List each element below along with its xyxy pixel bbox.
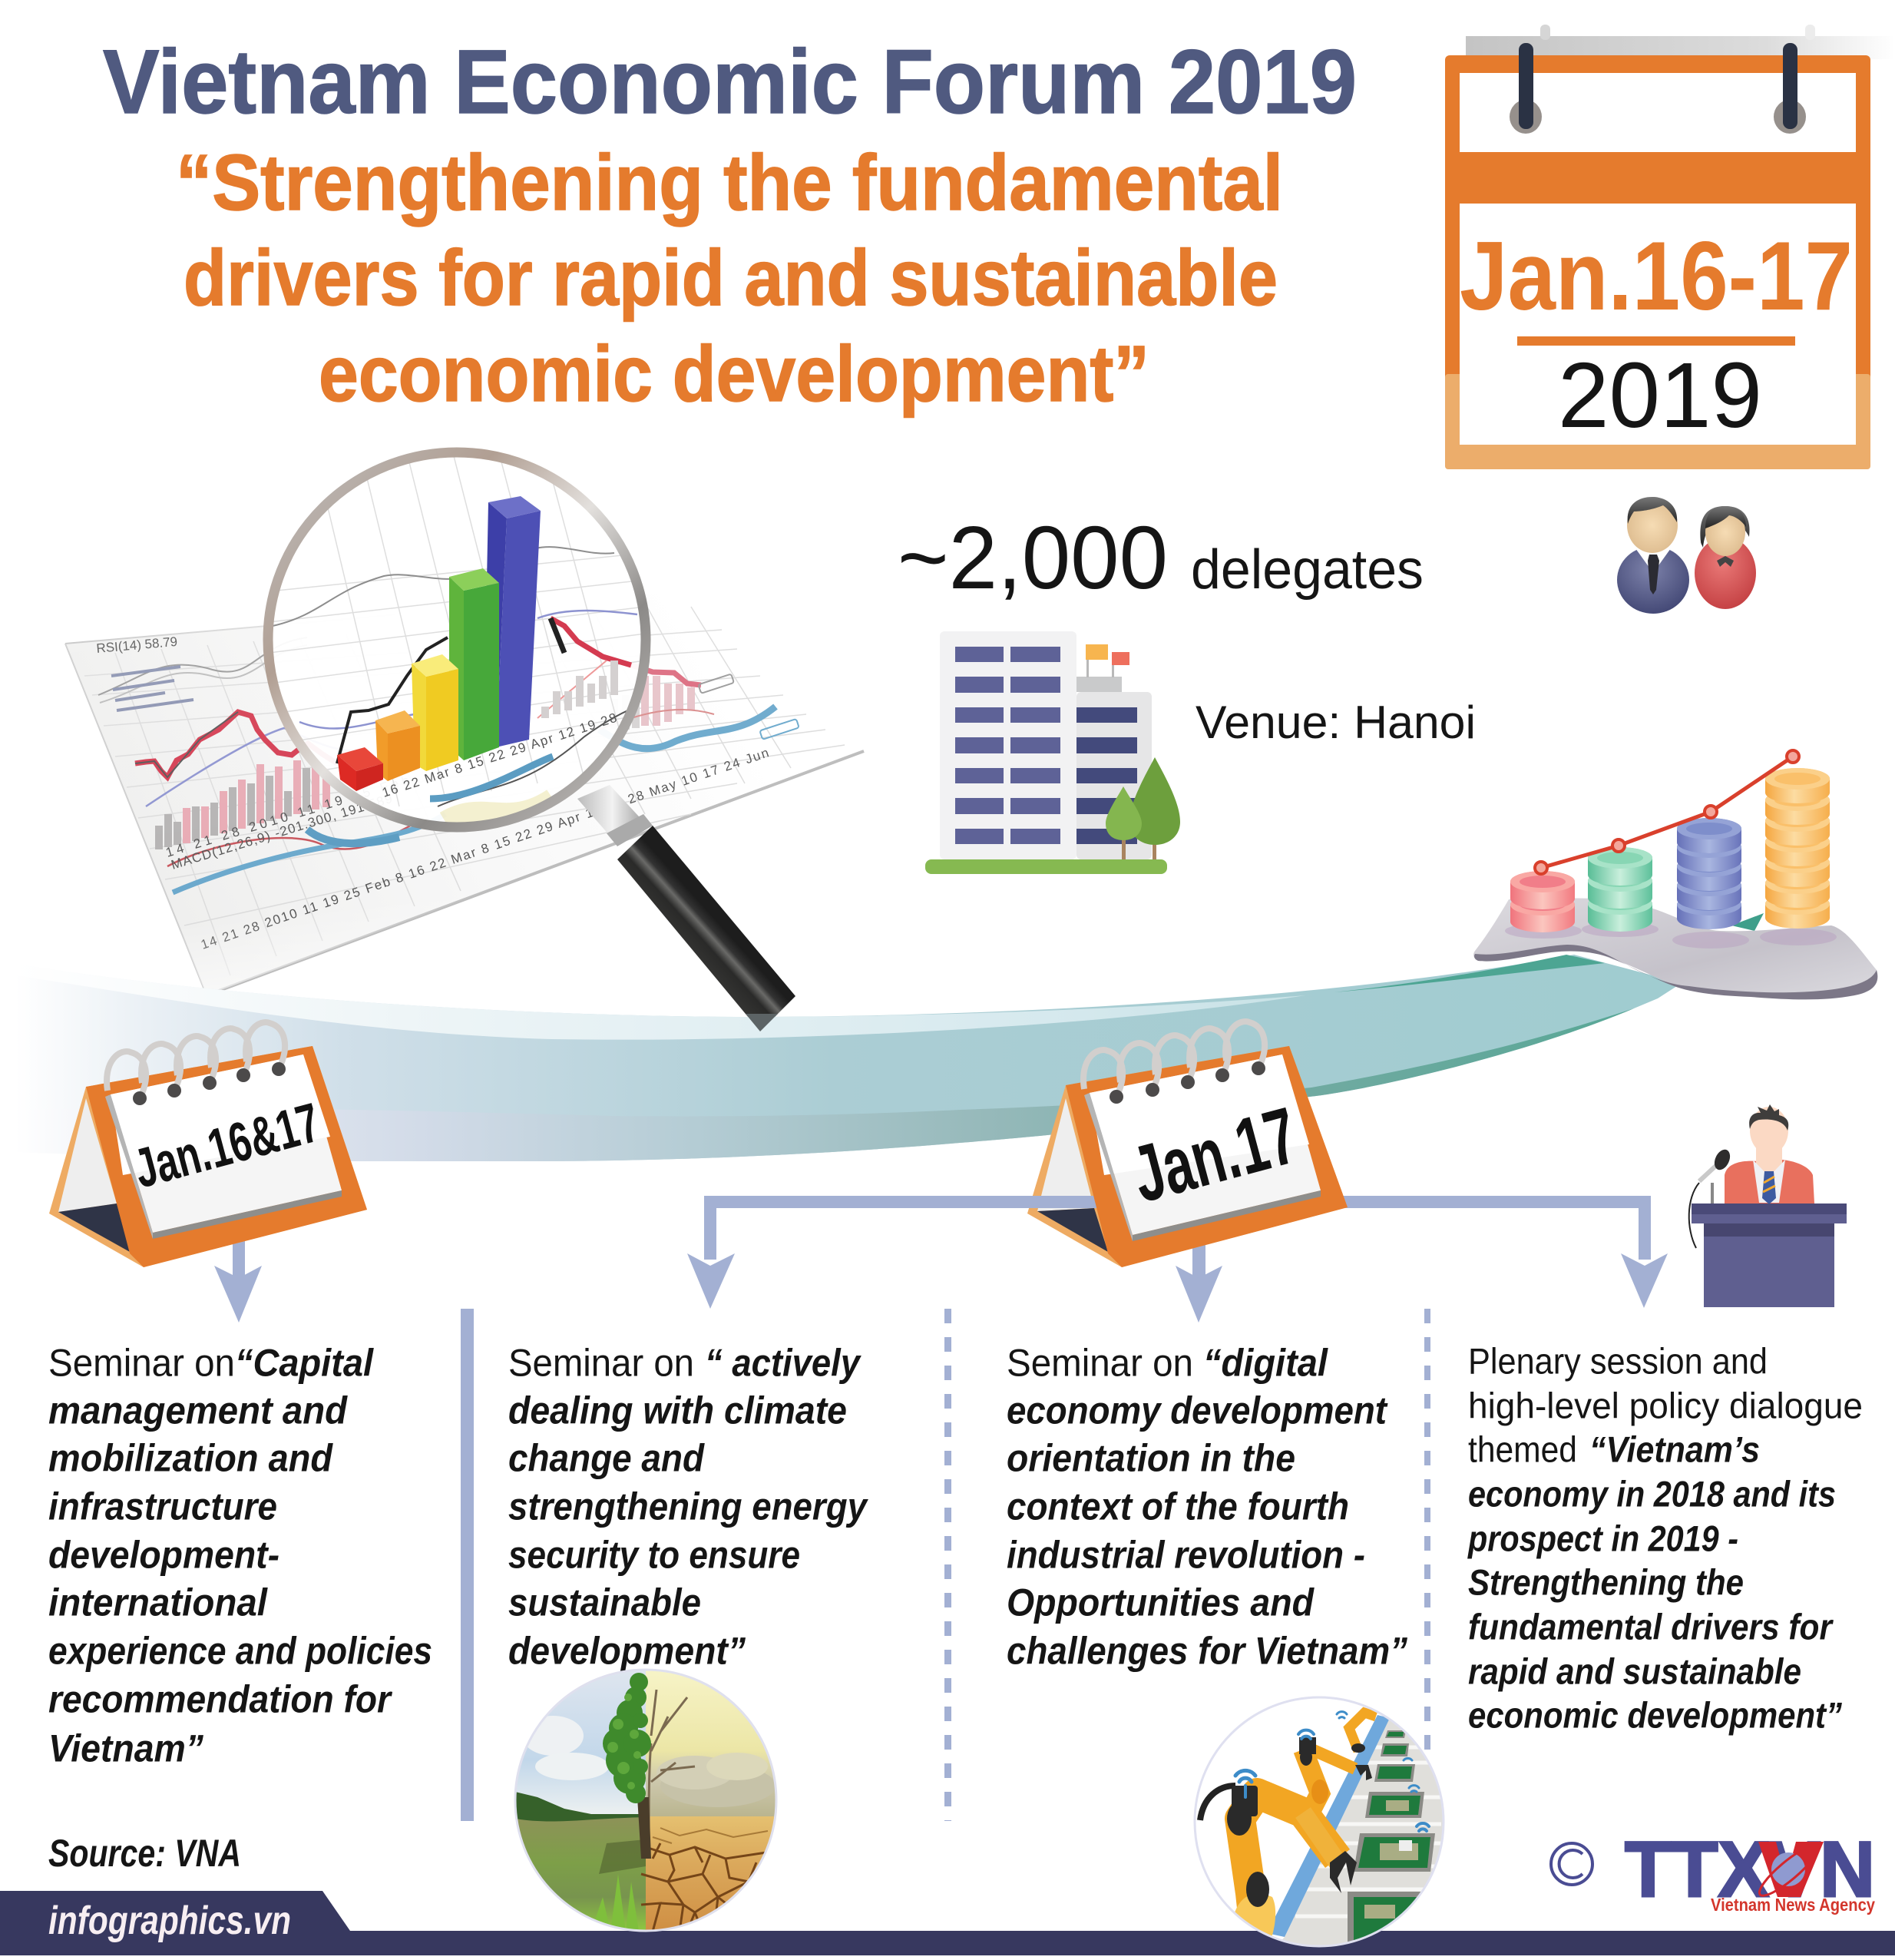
text: seminar 2 bbox=[508, 1341, 868, 1673]
text: seminar 2: strengthening energy bbox=[508, 1485, 868, 1528]
wifi signals bbox=[1235, 1712, 1429, 1831]
text: plenary session: prospect in 2019 - bbox=[1467, 1518, 1738, 1559]
text: seminar 2: Seminar on bbox=[508, 1341, 694, 1384]
text: plenary session: “Vietnam’s bbox=[1589, 1429, 1760, 1470]
image: industrial robots circle bbox=[1195, 1697, 1457, 1951]
robot arm small bbox=[1349, 1713, 1376, 1751]
text: seminar 3: orientation in the bbox=[1007, 1436, 1295, 1479]
platform bbox=[1473, 899, 1877, 998]
footer label: infographics.vn bbox=[48, 1899, 291, 1943]
text: seminar 3: challenges for Vietnam” bbox=[1007, 1630, 1407, 1673]
date label: Jan.16&17 bbox=[127, 1092, 326, 1200]
delegates count: delegates bbox=[1191, 539, 1424, 601]
text: seminar 1: development- bbox=[48, 1533, 279, 1576]
subtitle: drivers for rapid and sustainable bbox=[184, 233, 1278, 322]
lens view bbox=[269, 453, 645, 826]
text: plenary session: rapid and sustainable bbox=[1468, 1651, 1801, 1691]
text: seminar 1: recommendation for bbox=[48, 1677, 392, 1720]
robot arm large bbox=[1200, 1786, 1338, 1951]
text: seminar 2: sustainable bbox=[508, 1581, 701, 1624]
text: seminar 1: management and bbox=[48, 1389, 348, 1432]
chart with magnifying glass bbox=[65, 452, 864, 1031]
robot arm medium bbox=[1307, 1747, 1355, 1769]
text: seminar 2: security to ensure bbox=[508, 1533, 800, 1576]
text: seminar 1: experience and policies bbox=[48, 1630, 432, 1673]
magnifier handle bbox=[577, 785, 795, 1031]
logo: TTXVN: TTXVN bbox=[1625, 1826, 1875, 1913]
calendar: Jan.16-17 2019 bbox=[1445, 25, 1895, 469]
text: seminar 3 bbox=[1007, 1341, 1407, 1673]
subtitle: “Strengthening the fundamental bbox=[176, 138, 1283, 227]
agency name: Vietnam News Agency bbox=[1711, 1895, 1875, 1915]
connector arrows bbox=[214, 1196, 1668, 1323]
chart paper: 14 21 28 2010 11 19 25 Feb 8 16 22 Mar 8 15 22 29 Apr 12 19 28 May 10 17 24 Jun bbox=[199, 745, 771, 952]
pink stack bbox=[1510, 871, 1575, 932]
date label: Jan.17 bbox=[1123, 1091, 1307, 1220]
text: seminar 3: Seminar on bbox=[1007, 1341, 1193, 1384]
text: plenary session: themed bbox=[1468, 1429, 1577, 1470]
source: Source: VNA bbox=[48, 1832, 241, 1875]
icon: delegates bbox=[1617, 497, 1756, 614]
lens ring bbox=[268, 452, 646, 827]
text: seminar 2: change and bbox=[508, 1436, 705, 1479]
blue stack bbox=[1677, 818, 1741, 929]
text: seminar 1: infrastructure bbox=[48, 1485, 277, 1528]
divider: dashed bbox=[1424, 1309, 1430, 1774]
growth line bbox=[1535, 750, 1799, 874]
text: seminar 1: Seminar on bbox=[48, 1341, 235, 1384]
text: seminar 3: “digital bbox=[1203, 1341, 1328, 1384]
text: seminar 1: “Capital bbox=[235, 1341, 374, 1384]
text: plenary session: high-level policy dialogue bbox=[1468, 1386, 1863, 1425]
text: seminar 1: Vietnam” bbox=[48, 1727, 203, 1770]
divider: dashed bbox=[944, 1309, 951, 1821]
text: seminar 2: development” bbox=[508, 1630, 746, 1673]
calendar: Jan.16&17 bbox=[49, 1022, 367, 1267]
3D bars bbox=[337, 496, 541, 791]
title: Vietnam Economic Forum 2019 bbox=[103, 31, 1357, 133]
text: plenary session: economy in 2018 and its bbox=[1468, 1473, 1836, 1515]
icon: building bbox=[925, 631, 1180, 874]
chart paper bbox=[65, 591, 864, 995]
magnifier handle tip over ribbon bbox=[746, 1014, 778, 1031]
text: seminar 3: context of the fourth bbox=[1007, 1485, 1349, 1528]
lens view: 16 22 Mar 8 15 22 29 Apr 12 19 28 bbox=[380, 710, 619, 800]
text: seminar 1: mobilization and bbox=[48, 1436, 333, 1479]
text: seminar 2: dealing with climate bbox=[508, 1389, 847, 1432]
text: plenary session: Plenary session and bbox=[1468, 1341, 1768, 1381]
text: seminar 3: economy development bbox=[1007, 1389, 1388, 1432]
subtitle: economic development” bbox=[319, 329, 1149, 418]
image: climate change circle bbox=[515, 1668, 776, 1932]
delegates count bbox=[898, 508, 1424, 608]
chart paper: MACD(12,26,9) -201.300, 191.589 bbox=[170, 791, 394, 872]
divider: solid bbox=[461, 1309, 474, 1821]
subtitle bbox=[176, 138, 1283, 418]
text: plenary session: Strengthening the bbox=[1468, 1562, 1744, 1602]
swoosh ribbon bbox=[15, 913, 1764, 1161]
text: plenary session bbox=[1467, 1341, 1863, 1736]
calendar year: 2019 bbox=[1558, 343, 1762, 447]
orange stack bbox=[1765, 768, 1830, 929]
text: seminar 1: international bbox=[48, 1581, 268, 1624]
green stack bbox=[1588, 847, 1652, 932]
copyright mark bbox=[1551, 1843, 1592, 1885]
coin stacks on platform bbox=[1473, 750, 1877, 999]
icon: speaker at podium bbox=[1689, 1104, 1847, 1307]
text: seminar 2: “ actively bbox=[705, 1341, 862, 1384]
chart paper: 14 21 28 2010 11 19 25 Feb bbox=[164, 773, 411, 860]
text: plenary session: fundamental drivers for bbox=[1468, 1607, 1834, 1647]
calendar: Jan.17 bbox=[1027, 1021, 1348, 1267]
chart paper: RSI(14) 58.79 bbox=[96, 634, 178, 656]
delegates count: ~2,000 bbox=[898, 508, 1168, 608]
calendar date: Jan.16-17 bbox=[1460, 221, 1853, 330]
text: seminar 3: Opportunities and bbox=[1007, 1581, 1315, 1624]
text: plenary session: economic development” bbox=[1468, 1694, 1842, 1736]
footer bar bbox=[0, 1891, 1895, 1955]
venue label: Venue: Hanoi bbox=[1196, 697, 1476, 748]
text: seminar 1 bbox=[48, 1341, 432, 1770]
text: seminar 3: industrial revolution - bbox=[1007, 1533, 1365, 1576]
